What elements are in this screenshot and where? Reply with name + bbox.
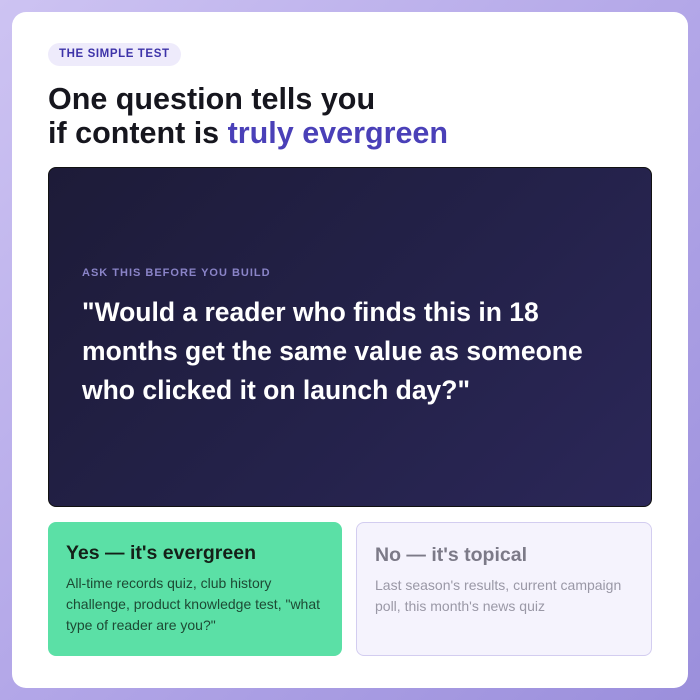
- panel: no: [356, 522, 652, 656]
- yes text: All-time records quiz, club history challenge, product knowledge test, "what type of reader are you?": [66, 575, 320, 633]
- title: if content is truly evergreen: [48, 116, 448, 150]
- panel: question: [48, 167, 652, 507]
- question text: "Would a reader who finds this in 18 months get the same value as someone who clicked it on launch day?": [82, 297, 583, 405]
- title: [48, 82, 448, 150]
- title: One question tells you: [48, 82, 375, 116]
- no heading: No — it's topical: [375, 544, 527, 566]
- pill label: THE SIMPLE TEST: [59, 48, 170, 60]
- panel: yes: [48, 522, 342, 656]
- no text: Last season's results, current campaign poll, this month's news quiz: [375, 577, 621, 614]
- question label: ASK THIS BEFORE YOU BUILD: [82, 267, 271, 279]
- pill label: [48, 43, 181, 66]
- yes heading: Yes — it's evergreen: [66, 542, 256, 564]
